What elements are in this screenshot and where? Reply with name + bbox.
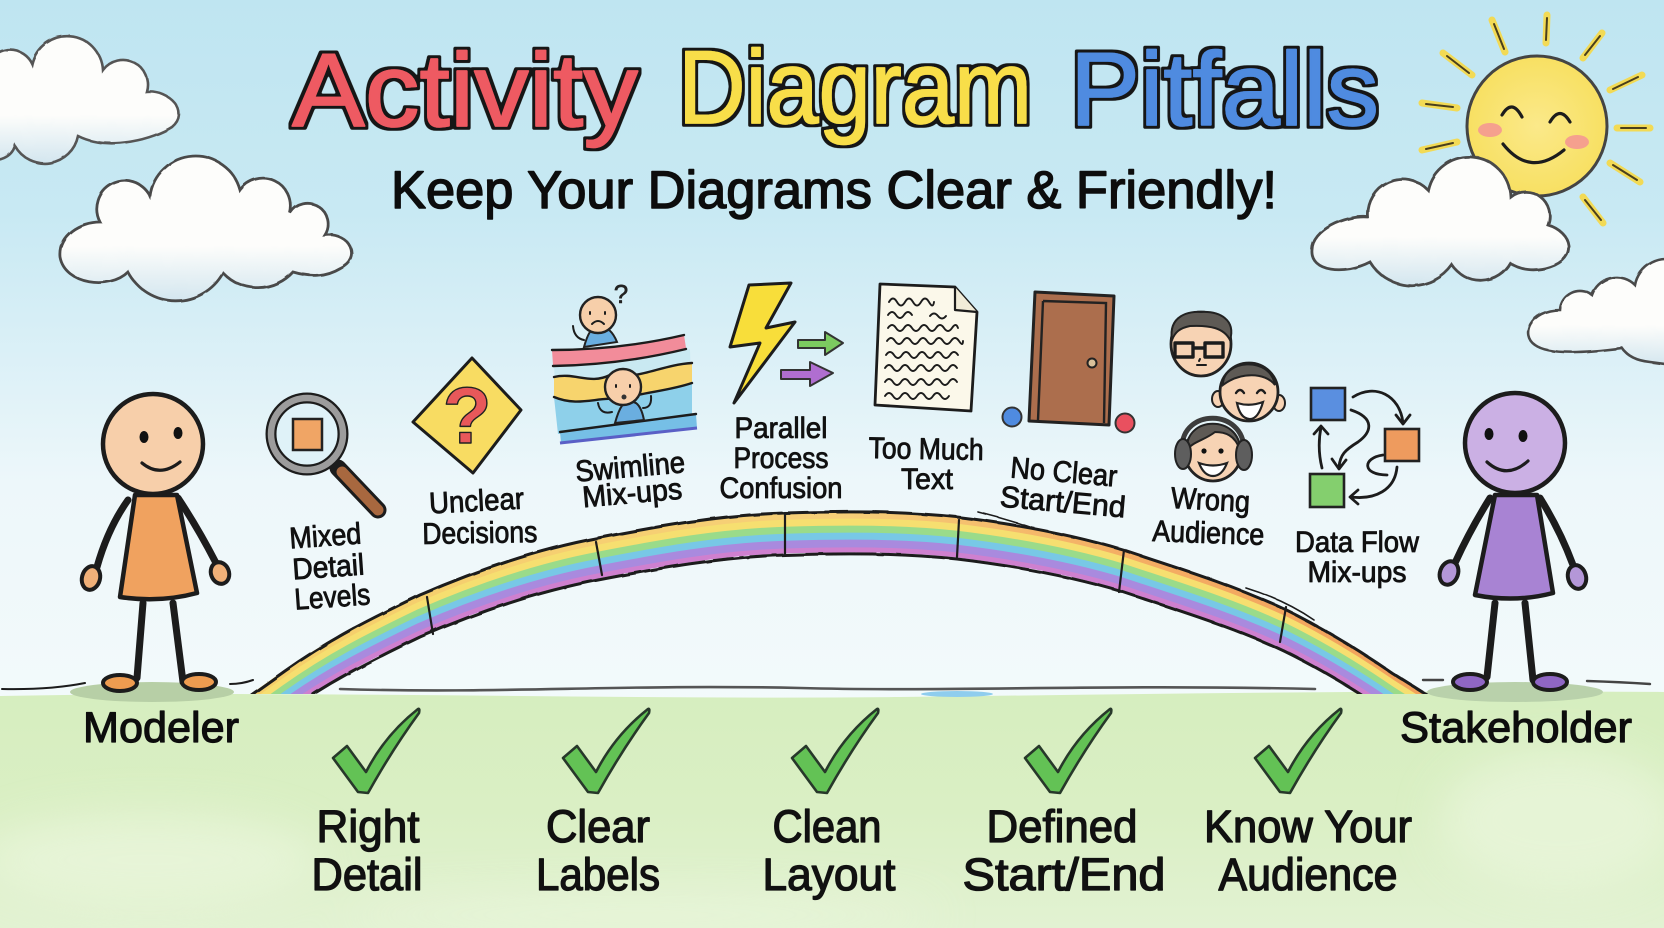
icon: swimlane bands with confused people [552,279,697,443]
label lines: Detail [312,849,422,900]
ground shadow [1427,682,1603,702]
face [140,427,182,470]
label lines: Defined [986,801,1138,852]
feet [103,674,216,691]
label lines [536,801,660,900]
pitfall: too much text [868,284,984,496]
label lines: Audience [1152,515,1265,552]
arms and legs [97,498,216,682]
label lines: Know Your [1204,801,1412,852]
remedy: know your audience [1204,709,1412,900]
arms and legs [1455,498,1573,680]
label lines: Swimline [574,446,686,489]
label lines: Parallel [734,412,828,445]
pitfall: mixed detail levels [271,398,378,617]
icon: face with glasses [1171,312,1231,376]
actor: Stakeholder [1423,393,1650,702]
label lines [962,801,1166,900]
label lines: Start/End [999,481,1127,524]
label lines [574,446,686,514]
label lines: Start/End [962,849,1166,900]
cloud: in front of sun [1312,157,1569,286]
grass light patches [0,750,1664,928]
icon: decision diamond [413,358,521,473]
tunic [1475,495,1553,599]
sun cheeks [1478,123,1589,149]
horizon line under bridge [340,687,1315,690]
icon: laughing face [1212,363,1285,421]
label: Stakeholder: Stakeholder [1400,704,1632,752]
ground lines [2,680,253,689]
actor: Modeler [2,394,253,702]
label lines [1295,526,1419,589]
title word: Diagram: Diagram [678,30,1032,146]
grass ground [0,691,1664,928]
label lines [762,801,896,900]
label lines: Detail [291,549,365,586]
pitfall: no clear start or end [999,292,1134,524]
label lines: Decisions [422,516,538,551]
label lines: Mixed [288,518,362,555]
hands [79,560,232,592]
icon: green check [792,709,878,793]
sun face disc [1467,56,1607,196]
label lines: Text [901,463,954,496]
rainbow segment dividers [427,513,1286,642]
icon: smiling sun [1422,15,1650,223]
rainbow outlines [250,510,1428,694]
pitfall: unclear decisions [413,358,538,551]
label lines: Right [316,801,420,852]
title [292,30,1379,149]
label lines: Labels [536,849,660,900]
label lines [720,412,842,505]
icon: magnifying glass [271,398,378,510]
label lines: Levels [293,578,371,617]
icon: lightning bolt and arrows [730,283,843,403]
label lines [999,451,1127,524]
icon: green check [1255,709,1341,793]
head [1465,393,1565,493]
label lines: Mix-ups [1308,556,1406,589]
subtitle: Keep Your Diagrams Clear & Friendly! [391,161,1277,220]
label lines: Mix-ups [581,473,683,514]
label lines: Clear [546,801,650,852]
label lines: No Clear [1009,451,1119,494]
head [103,394,203,494]
cloud: middle left [60,156,352,301]
label lines: Audience [1218,849,1398,900]
label: Modeler: Modeler [83,704,239,752]
label lines: Unclear [428,483,525,520]
blue patch under bridge [921,691,993,697]
label lines: Data Flow [1295,526,1419,559]
icon: swimlane bands with confused people: ? [614,279,628,309]
label lines [288,518,371,617]
label lines: Confusion [720,472,842,505]
icon: green check [1025,709,1111,793]
remedy: clear labels [536,709,660,900]
face [1484,428,1528,471]
remedy: clean layout [762,709,896,900]
ground shadow [70,682,234,702]
pitfall: wrong audience [1152,312,1285,552]
title word: Pitfalls: Pitfalls [1070,32,1379,148]
icon: dense document [875,284,977,411]
label lines: Layout [762,849,896,900]
label lines [868,432,984,496]
ground lines [1423,680,1650,684]
sky background [0,0,1664,710]
cloud: top left [0,36,179,163]
tunic [120,495,197,599]
pitfall: data flow mix-ups [1295,388,1419,589]
hands [1436,559,1589,591]
remedy: right detail [312,709,422,900]
icon: green check [333,709,419,793]
icon: decision diamond: ? [443,371,491,460]
sun smile and eyes [1502,107,1570,163]
icon: face with headset [1175,418,1252,481]
rainbow bridge [250,510,1428,694]
pitfall: parallel process confusion [720,283,843,505]
label lines: Too Much [868,432,984,467]
label lines [1204,801,1412,900]
label lines: Process [734,442,828,475]
icon: tangled data flow [1310,388,1419,507]
icon: green check [563,709,649,793]
title word: Activity: Activity [292,33,638,149]
feet [1453,674,1567,690]
sun rays [1422,15,1650,223]
label lines [312,801,422,900]
icon: door with start and end dots [1002,292,1134,432]
pitfall: swimlane mix-ups [552,279,697,514]
label lines: Clean [772,801,882,852]
remedy: defined start and end [962,709,1166,900]
label lines [1152,482,1265,552]
rainbow colour bands [255,513,1422,694]
cloud: right edge [1528,259,1664,366]
label lines [422,483,538,551]
label lines: Wrong [1170,482,1251,519]
